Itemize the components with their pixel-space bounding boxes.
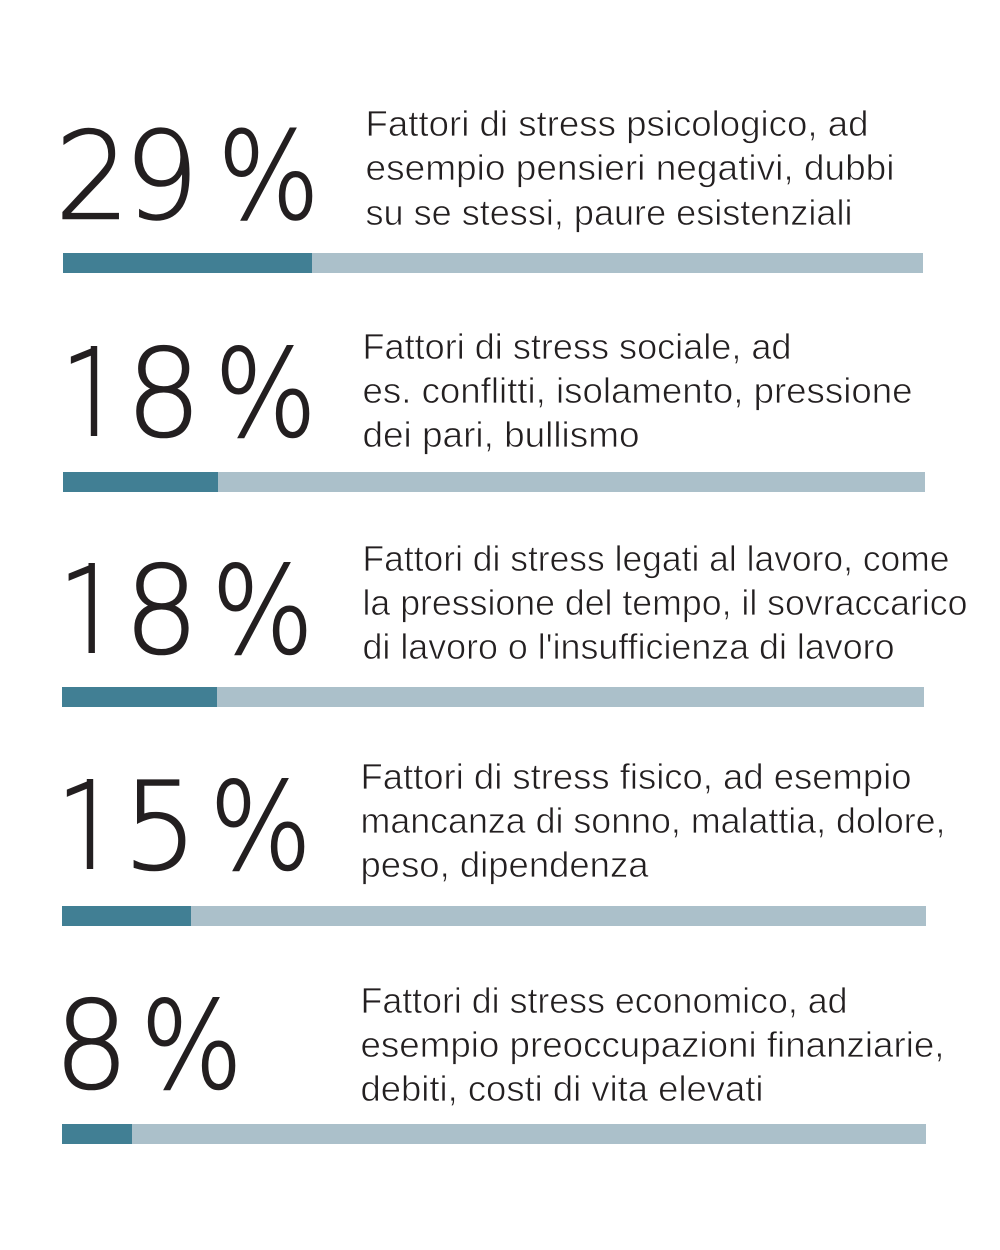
progress bar 29% — [63, 253, 923, 273]
text: physical description: Fattori di stress fisico, ad esempio — [360, 756, 912, 797]
text: physical description: peso, dipendenza — [360, 844, 649, 885]
panel: social stress — [58, 323, 925, 492]
text: work description: di lavoro o l'insufficienza di lavoro — [362, 626, 894, 667]
progress bar 8% — [62, 1124, 926, 1144]
progress bar 15% — [62, 906, 926, 926]
text: psychological description: Fattori di stress psicologico, ad — [366, 103, 868, 144]
percentage: 15%: % — [210, 756, 312, 898]
panel: work stress — [56, 538, 967, 707]
percentage: 15%: 5 — [123, 756, 198, 898]
panel: economic stress — [54, 975, 944, 1144]
text: work description: Fattori di stress legati al lavoro, come — [362, 538, 950, 579]
panel: psychological stress — [55, 103, 923, 273]
text: social description: dei pari, bullismo — [362, 414, 640, 455]
percentage: 18%: 1 — [56, 540, 132, 682]
progress bar 18% — [63, 472, 925, 492]
percentage: 8%: 8 — [54, 975, 129, 1117]
text: economic description: esempio preoccupazioni finanziarie, — [360, 1024, 944, 1065]
percentage: 8% — [54, 975, 243, 1117]
text: social description — [362, 326, 912, 455]
percentage: 18% — [68, 562, 306, 656]
percentage: 29%: % — [218, 106, 320, 248]
percentage: 18%: 8 — [124, 540, 199, 682]
text: psychological description: su se stessi, paure esistenziali — [366, 192, 852, 233]
text: physical description — [360, 756, 946, 885]
percentage: 15%: 1 — [54, 756, 130, 898]
percentage: 18% — [70, 344, 310, 438]
percentage: 29%: 9 — [124, 106, 199, 248]
progress bar 18% — [62, 687, 924, 707]
text: physical description: mancanza di sonno, malattia, dolore, — [360, 800, 946, 841]
text: psychological description — [366, 103, 894, 233]
percentage: 8%: % — [141, 975, 243, 1117]
text: economic description: debiti, costi di vita elevati — [360, 1068, 764, 1109]
text: economic description — [360, 980, 944, 1109]
percentage: 15% — [66, 778, 304, 872]
text: work description: la pressione del tempo, il sovraccarico — [362, 582, 968, 623]
panel: physical stress — [54, 756, 946, 926]
text: social description: Fattori di stress sociale, ad — [362, 326, 792, 367]
text: social description: es. conflitti, isolamento, pressione — [362, 370, 912, 411]
percentage: 18%: 8 — [126, 323, 202, 465]
percentage: 29% — [55, 106, 320, 248]
text: economic description: Fattori di stress economico, ad — [360, 980, 848, 1021]
text: psychological description: esempio pensieri negativi, dubbi — [366, 147, 894, 188]
percentage: 18%: % — [212, 540, 314, 682]
percentage: 29%: 2 — [55, 106, 130, 248]
text: work description — [362, 538, 968, 667]
percentage: 18%: % — [215, 323, 317, 465]
percentage: 18%: 1 — [58, 323, 134, 465]
